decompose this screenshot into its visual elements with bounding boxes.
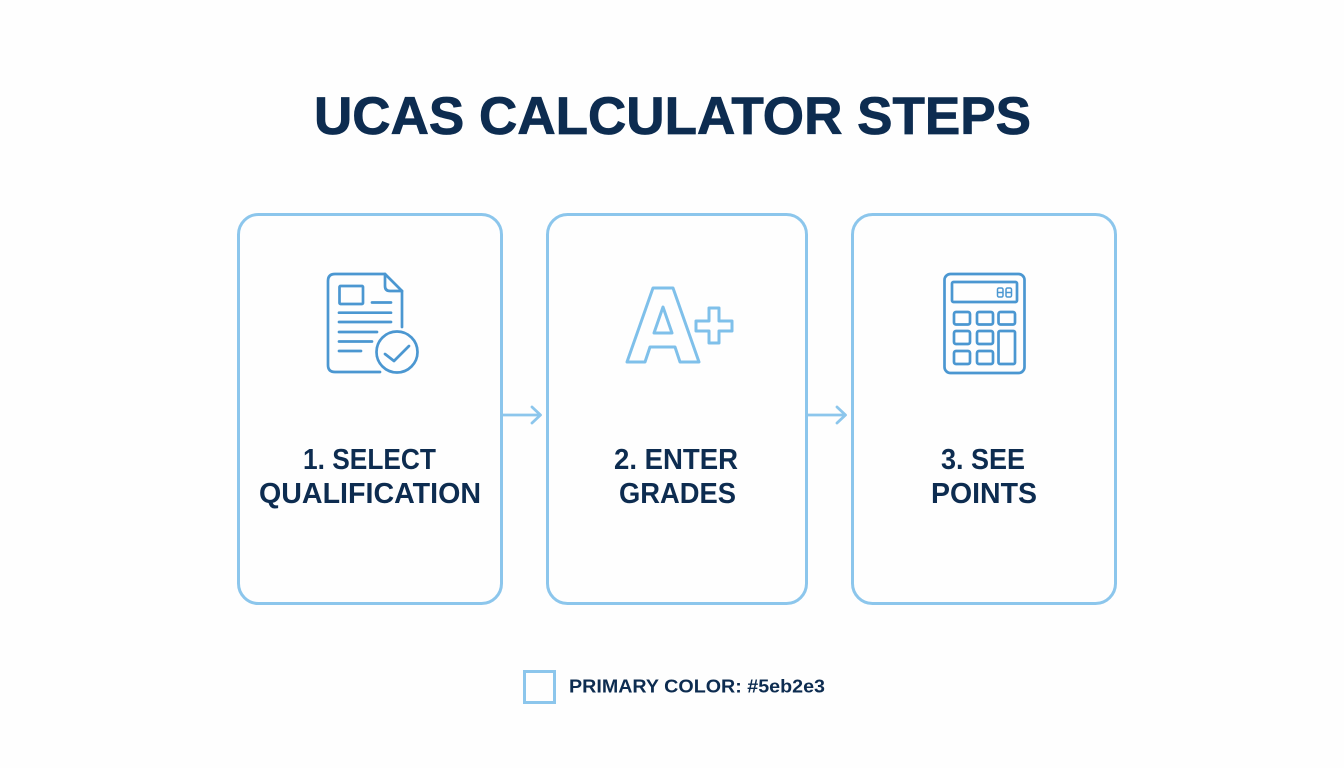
arrow: step 1 to step 2 — [503, 407, 540, 423]
step 3 label — [931, 444, 1037, 510]
step 1 label: QUALIFICATION — [259, 478, 481, 510]
step 2 label — [614, 444, 738, 510]
icon: A plus grade — [627, 288, 732, 362]
legend — [524, 672, 825, 702]
panel: step 2 enter grades — [548, 214, 806, 604]
icon: calculator — [944, 274, 1024, 373]
step 2 label: GRADES — [619, 478, 736, 510]
title: UCAS CALCULATOR STEPS — [314, 87, 1031, 146]
icon: document with check mark — [328, 274, 418, 372]
step 3 label: 3. SEE — [941, 444, 1025, 476]
panel: step 3 see points — [852, 214, 1116, 604]
arrow: step 2 to step 3 — [808, 407, 846, 423]
panel: step 1 select qualification — [238, 214, 502, 604]
step 3 label: POINTS — [931, 478, 1037, 510]
step 1 label — [259, 444, 481, 510]
step 1 label: 1. SELECT — [303, 444, 436, 476]
step 2 label: 2. ENTER — [614, 444, 738, 476]
legend label: PRIMARY COLOR: #5eb2e3 — [569, 676, 825, 696]
legend colour swatch — [524, 672, 554, 702]
